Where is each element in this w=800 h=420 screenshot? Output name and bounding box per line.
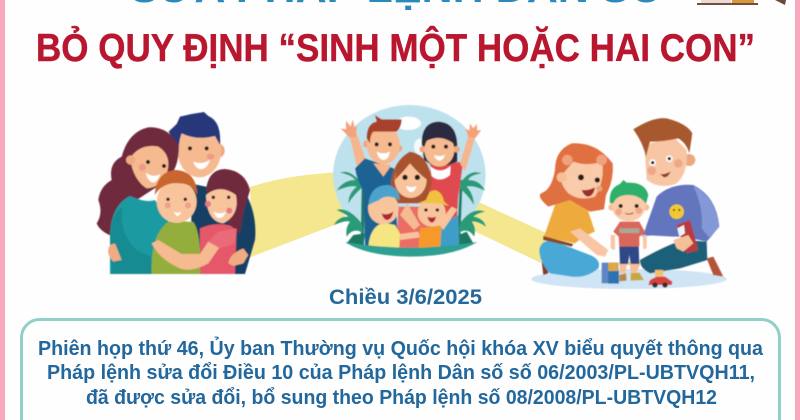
icon: gavel and book (cropped) (697, 0, 786, 5)
date label: Chiều 3/6/2025 (329, 286, 482, 309)
illustration: parents playing with child (531, 118, 727, 289)
summary text line 2: Pháp lệnh sửa đổi Điều 10 của Pháp lệnh Dân số số 06/2003/PL-UBTVQH11, (47, 361, 755, 384)
panel: decision summary (22, 320, 780, 420)
summary text line 1: Phiên họp thứ 46, Ủy ban Thường vụ Quốc hội khóa XV biểu quyết thông qua (38, 336, 764, 360)
yellow connector left (243, 172, 345, 260)
yellow connector right (470, 198, 546, 263)
illustration: family hugging (97, 112, 255, 274)
summary text line 3: đã được sửa đổi, bổ sung theo Pháp lệnh số 08/2008/PL-UBTVQH12 (86, 386, 717, 409)
illustration: family waving with palm trees (333, 105, 486, 257)
